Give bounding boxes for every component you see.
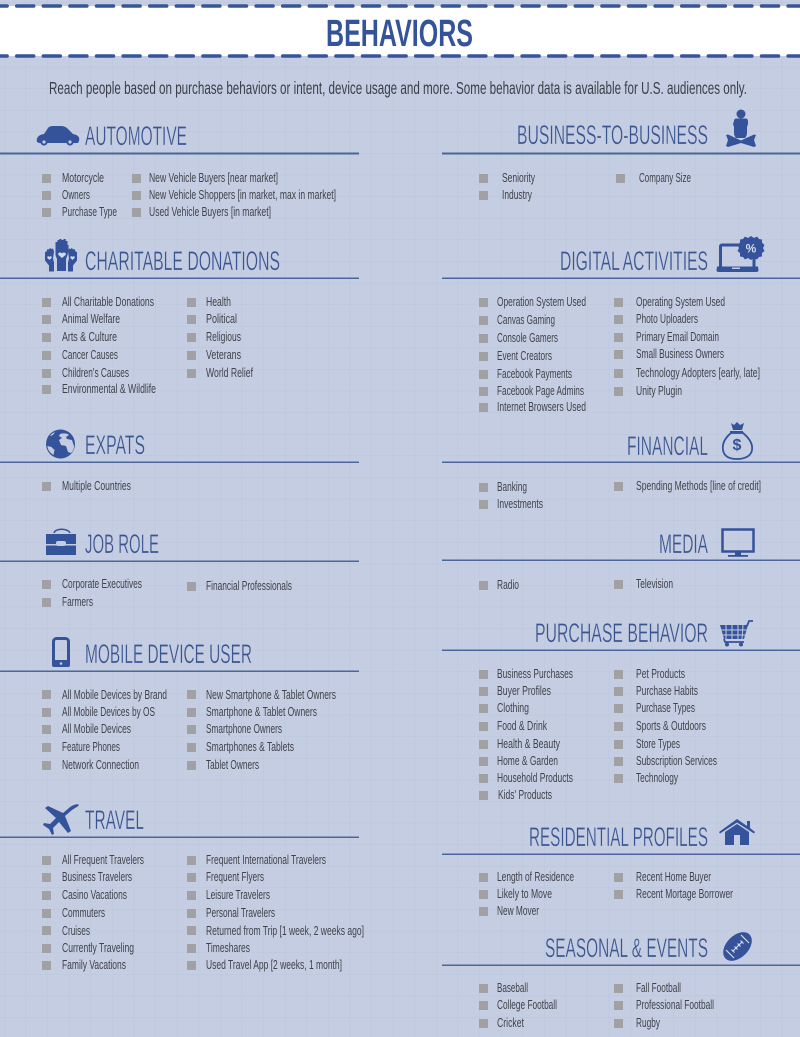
- panel: job role: JOB ROLE: [85, 529, 159, 559]
- panel: automotive: AUTOMOTIVE: [85, 121, 187, 151]
- panel: digital activities: Small Business Owners: [636, 347, 724, 361]
- panel: travel: Frequent International Travelers: [206, 853, 326, 867]
- panel: travel: Currently Traveling: [62, 941, 134, 955]
- title banner: BEHAVIORS: [326, 13, 473, 55]
- icon: phone: [52, 638, 70, 667]
- panel: charitable donations: Political: [206, 312, 237, 326]
- panel: residential profiles: New Mover: [497, 904, 539, 918]
- panel: charitable donations: Animal Welfare: [62, 312, 120, 326]
- panel: mobile device user: All Mobile Devices by OS: [62, 705, 155, 719]
- panel: residential profiles: Likely to Move: [497, 887, 552, 901]
- panel: charitable donations: CHARITABLE DONATIONS: [85, 246, 280, 276]
- icon: laptop with percent badge: %: [746, 242, 757, 256]
- panel: job role: Corporate Executives: [62, 577, 142, 591]
- panel: digital activities: Operation System Used: [497, 295, 586, 309]
- panel: seasonal and events: Rugby: [636, 1016, 660, 1030]
- panel: mobile device user: All Mobile Devices by Brand: [62, 688, 167, 702]
- icon: monitor: [722, 530, 754, 557]
- panel: charitable donations: Environmental & Wildlife: [62, 382, 156, 396]
- panel: travel: [0, 804, 364, 972]
- icon: laptop with percent badge: [716, 236, 764, 272]
- panel: travel: Returned from Trip [1 week, 2 weeks ago]: [206, 924, 364, 938]
- panel: charitable donations: All Charitable Donations: [62, 295, 154, 309]
- panel: mobile device user: Tablet Owners: [206, 758, 259, 772]
- panel: automotive: Used Vehicle Buyers [in market]: [149, 205, 271, 219]
- panel: charitable donations: Children's Causes: [62, 366, 129, 380]
- panel: digital activities: [442, 236, 800, 414]
- panel: digital activities: Operating System Used: [636, 295, 725, 309]
- panel: purchase behavior: Purchase Habits: [636, 684, 698, 698]
- panel: charitable donations: [0, 239, 359, 396]
- panel: media: MEDIA: [659, 529, 708, 559]
- panel: purchase behavior: Food & Drink: [497, 719, 548, 733]
- panel: charitable donations: Health: [206, 295, 231, 309]
- panel: digital activities: Facebook Page Admins: [497, 384, 584, 398]
- panel: mobile device user: Smartphones & Tablets: [206, 740, 294, 754]
- panel: travel: Leisure Travelers: [206, 888, 270, 902]
- icon: briefcase: [46, 529, 76, 555]
- panel: business-to-business: Company Size: [639, 171, 691, 185]
- panel: seasonal and events: [442, 927, 800, 1030]
- panel: mobile device user: Feature Phones: [62, 740, 120, 754]
- panel: media: Radio: [497, 578, 519, 592]
- panel: digital activities: Canvas Gaming: [497, 313, 555, 327]
- panel: purchase behavior: Sports & Outdoors: [636, 719, 706, 733]
- icon: house: [719, 819, 755, 845]
- panel: travel: Commuters: [62, 906, 105, 920]
- panel: financial: Banking: [497, 480, 527, 494]
- panel: automotive: [0, 121, 359, 219]
- panel: charitable donations: Religious: [206, 330, 241, 344]
- panel: purchase behavior: Pet Products: [636, 667, 685, 681]
- panel: mobile device user: All Mobile Devices: [62, 722, 131, 736]
- panel: mobile device user: New Smartphone & Tablet Owners: [206, 688, 336, 702]
- panel: travel: Frequent Flyers: [206, 870, 264, 884]
- panel: digital activities: Facebook Payments: [497, 367, 572, 381]
- panel: job role: Farmers: [62, 595, 93, 609]
- panel: digital activities: Primary Email Domain: [636, 330, 719, 344]
- icon: hands: [45, 239, 77, 272]
- icon: shopping cart: [720, 621, 753, 646]
- panel: mobile device user: MOBILE DEVICE USER: [85, 639, 252, 669]
- icon: seated person: [726, 110, 756, 147]
- panel: automotive: New Vehicle Buyers [near market]: [149, 171, 278, 185]
- panel: financial: [442, 422, 800, 511]
- panel: travel: Timeshares: [206, 941, 250, 955]
- panel: seasonal and events: College Football: [497, 998, 557, 1012]
- panel: charitable donations: Cancer Causes: [62, 348, 118, 362]
- panel: charitable donations: Arts & Culture: [62, 330, 117, 344]
- panel: automotive: Motorcycle: [62, 171, 104, 185]
- panel: seasonal and events: Baseball: [497, 981, 528, 995]
- panel: digital activities: Photo Uploaders: [636, 312, 698, 326]
- panel: travel: Cruises: [62, 924, 90, 938]
- panel: digital activities: Console Gamers: [497, 331, 558, 345]
- panel: business-to-business: Seniority: [502, 171, 536, 185]
- panel: mobile device user: Smartphone Owners: [206, 722, 282, 736]
- panel: digital activities: Event Creators: [497, 349, 552, 363]
- panel: expats: EXPATS: [85, 430, 145, 460]
- panel: travel: Casino Vacations: [62, 888, 127, 902]
- panel: mobile device user: [0, 638, 359, 772]
- panel: expats: [0, 430, 359, 493]
- panel: automotive: Owners: [62, 188, 90, 202]
- icon: money bag: $: [733, 437, 742, 454]
- panel: travel: TRAVEL: [85, 805, 144, 835]
- panel: purchase behavior: Clothing: [497, 701, 529, 715]
- panel: residential profiles: Recent Mortage Borrower: [636, 887, 733, 901]
- panel: business-to-business: [442, 110, 800, 202]
- panel: media: Television: [636, 577, 673, 591]
- panel: charitable donations: World Relief: [206, 366, 253, 380]
- icon: football: [718, 927, 757, 966]
- panel: financial: Investments: [497, 497, 543, 511]
- panel: purchase behavior: [442, 618, 800, 802]
- panel: residential profiles: [442, 819, 800, 918]
- panel: digital activities: Internet Browsers Used: [497, 400, 586, 414]
- panel: purchase behavior: Buyer Profiles: [497, 684, 551, 698]
- panel: travel: Personal Travelers: [206, 906, 275, 920]
- panel: mobile device user: Network Connection: [62, 758, 139, 772]
- icon: car: [37, 126, 79, 146]
- panel: travel: Used Travel App [2 weeks, 1 month]: [206, 958, 342, 972]
- panel: purchase behavior: Health & Beauty: [497, 737, 561, 751]
- panel: residential profiles: Length of Residence: [497, 870, 574, 884]
- panel: purchase behavior: Subscription Services: [636, 754, 717, 768]
- panel: purchase behavior: Technology: [636, 771, 678, 785]
- panel: purchase behavior: Home & Garden: [497, 754, 558, 768]
- panel: media: [442, 529, 800, 592]
- panel: financial: FINANCIAL: [627, 431, 708, 461]
- icon: airplane: [43, 804, 79, 835]
- panel: job role: [0, 529, 359, 609]
- title banner: [0, 6, 800, 56]
- panel: automotive: New Vehicle Shoppers [in market, max in market]: [149, 188, 336, 202]
- panel: purchase behavior: Store Types: [636, 737, 680, 751]
- panel: purchase behavior: Business Purchases: [497, 667, 573, 681]
- panel: purchase behavior: Household Products: [497, 771, 573, 785]
- panel: travel: Family Vacations: [62, 958, 126, 972]
- panel: charitable donations: Veterans: [206, 348, 241, 362]
- panel: travel: All Frequent Travelers: [62, 853, 144, 867]
- panel: seasonal and events: Professional Football: [636, 998, 714, 1012]
- icon: money bag: [723, 422, 752, 459]
- panel: mobile device user: Smartphone & Tablet Owners: [206, 705, 317, 719]
- panel: business-to-business: Industry: [502, 188, 533, 202]
- icon: globe: [46, 430, 75, 458]
- panel: purchase behavior: Purchase Types: [636, 701, 695, 715]
- panel: seasonal and events: Fall Football: [636, 981, 681, 995]
- panel: job role: Financial Professionals: [206, 579, 292, 593]
- panel: residential profiles: Recent Home Buyer: [636, 870, 711, 884]
- panel: digital activities: Unity Plugin: [636, 384, 682, 398]
- panel: automotive: Purchase Type: [62, 205, 117, 219]
- panel: seasonal and events: Cricket: [497, 1016, 524, 1030]
- panel: expats: Multiple Countries: [62, 479, 131, 493]
- panel: travel: Business Travelers: [62, 870, 132, 884]
- panel: purchase behavior: Kids' Products: [498, 788, 552, 802]
